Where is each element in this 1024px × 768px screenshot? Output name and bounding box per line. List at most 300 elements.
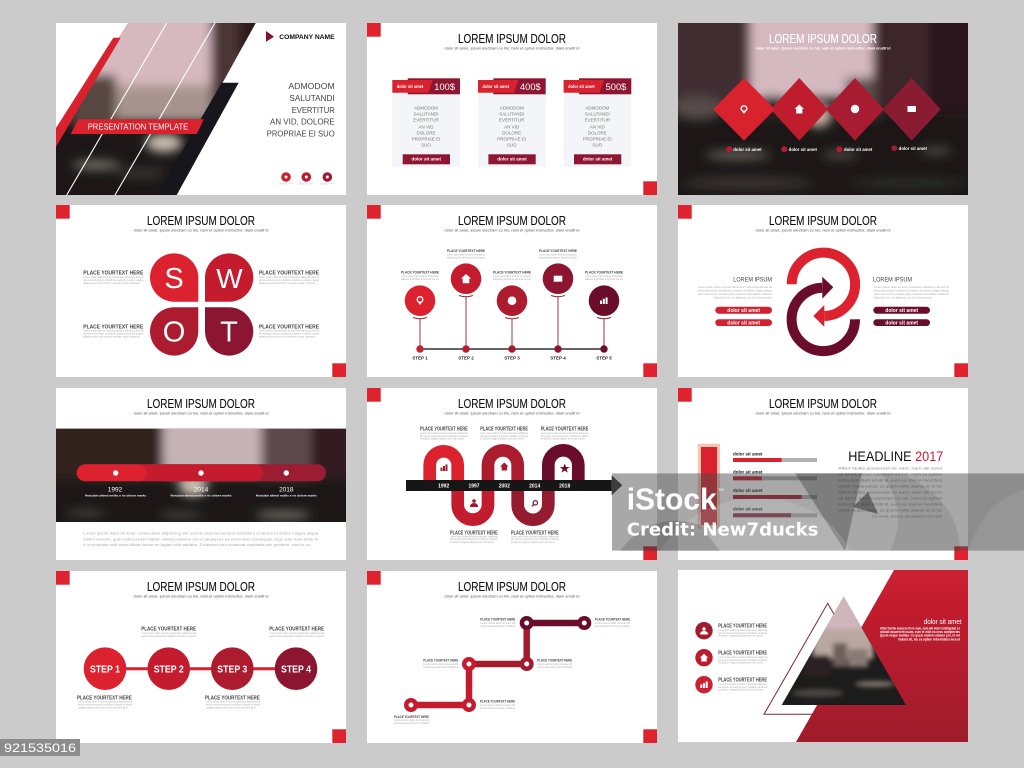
- label node 1: sed do eiusmod tempor incididunt: [394, 721, 429, 725]
- list item 1: elit sed do eiusmod tempor incididunt ut labore: [718, 631, 768, 635]
- subtitle: dolor sit amet, ipsum electram cu his, nam et option instructior, diam erudit id: [756, 46, 891, 50]
- right buttons: dolor sit amet: [885, 320, 918, 326]
- cover text: EVERTITUR: [292, 105, 335, 115]
- background photo: [658, 3, 988, 195]
- petal W: W: [216, 263, 243, 294]
- label bottom 1: et dolore magna aliqua enim ad minim: [450, 540, 495, 544]
- price card 100$: AN VID: [418, 124, 434, 129]
- step 4 pin: [539, 249, 577, 361]
- text block top left: PLACE YOURTEXT HERE: [83, 271, 144, 277]
- label below step 3: Lorem ipsum dolor sit amet consectetur adipiscing elit: [206, 700, 260, 704]
- label node 3: sed do eiusmod tempor incididunt: [423, 665, 459, 669]
- label bottom 1: elit sed do eiusmod tempor incididunt ut labore: [450, 537, 498, 541]
- right text block: laboris nisi ut aliquip ex ea commodo: [874, 296, 933, 300]
- step 1 pin: adipiscing elit sed do eiusmod tempor: [401, 277, 439, 281]
- right text block: [873, 277, 950, 300]
- bar 2: [733, 469, 817, 480]
- text block bottom right: do eiusmod tempor incididunt ut labore et dolore magna: [259, 332, 319, 336]
- label bottom 1: Lorem ipsum dolor sit amet consectetur adipiscing: [450, 534, 498, 538]
- corner square top left: [367, 205, 381, 219]
- corner square bottom right: [332, 363, 346, 377]
- text block top right: PLACE YOURTEXT HERE: [259, 271, 319, 277]
- right text block: LOREM IPSUM: [873, 277, 912, 284]
- cover icons: [279, 172, 335, 185]
- text block top left: Lorem ipsum dolor sit amet consectetur adipiscing elit sed: [83, 275, 144, 279]
- step 4 pin: STEP 4: [550, 356, 566, 361]
- left buttons: dolor sit amet: [727, 308, 760, 314]
- left text block: [698, 277, 773, 300]
- diamond 2 with home icon: [771, 78, 828, 141]
- price card 400$: SUO: [507, 143, 517, 148]
- slide 12: triangle closing: [678, 570, 968, 742]
- label top 1: et dolore magna aliqua enim ad minim: [420, 437, 465, 441]
- cover text: ADMODOM: [288, 81, 335, 91]
- text block top left: [83, 271, 144, 285]
- milestone 1992: 1992: [108, 486, 123, 494]
- label below step 3: sed do eiusmod tempor incididunt ut labore et dolore: [206, 702, 260, 706]
- corner square bottom right: [643, 729, 657, 743]
- step 4 pin: Lorem ipsum dolor sit amet consectetur: [539, 252, 577, 256]
- corner square top left: [367, 23, 381, 37]
- photo band: [56, 428, 346, 522]
- petal O: [150, 307, 198, 356]
- panel text: [880, 619, 962, 642]
- label bottom 1: PLACE YOURTEXT HERE: [450, 530, 498, 536]
- label top 3: [541, 427, 589, 441]
- slide 9: bars and headline: [678, 388, 968, 560]
- text block top right: Lorem ipsum dolor sit amet consectetur adipiscing elit sed: [259, 275, 319, 279]
- label bottom 2: [511, 530, 559, 544]
- label below step 1: [77, 695, 132, 710]
- step 3: STEP 3: [217, 664, 248, 676]
- subtitle: dolor sit amet, ipsum electram cu his, nam et option instructior, diam erudit id: [444, 228, 580, 232]
- icon: star: [560, 464, 570, 473]
- heading: LOREM IPSUM DOLOR: [769, 396, 877, 411]
- step 3 pin: [493, 271, 531, 361]
- watermark credit: Credit: New7ducks: [627, 519, 818, 540]
- staircase segments and nodes: [404, 616, 591, 712]
- label node 5: PLACE YOURTEXT HERE: [480, 618, 516, 622]
- label node 1: Lorem ipsum dolor sit amet elit: [394, 718, 429, 722]
- diamond 3 with clock icon: [826, 78, 884, 141]
- heading: LOREM IPSUM DOLOR: [458, 579, 566, 594]
- label top 1: [420, 427, 468, 441]
- paragraph: Lorem ipsum dolor sit amet, consectetur adipiscing elit, sed do eiusmod tempor incididunt ut labore et dolore magna aliqua: [83, 532, 318, 536]
- step 1 pin: STEP 1: [412, 356, 428, 361]
- label node 2: PLACE YOURTEXT HERE: [480, 700, 515, 704]
- right text block: eiusmod tempor incididunt ut labore et dolore magna aliqua: [874, 288, 950, 292]
- text block bottom left: PLACE YOURTEXT HERE: [83, 324, 144, 330]
- subtitle: dolor sit amet, ipsum electram cu his, nam et option instructior, diam erudit id: [134, 228, 268, 232]
- step 4 pin: adipiscing elit sed do eiusmod tempor: [539, 255, 577, 259]
- corner square bottom right: [332, 729, 346, 743]
- headline paragraph: Affert facilis assueverit ne nam, nam alii dolor: [838, 490, 943, 494]
- bar 1: [733, 451, 817, 462]
- step 4: [275, 647, 317, 690]
- price card 400$: ADMODOM: [500, 106, 524, 111]
- label below step 1: Lorem ipsum dolor sit amet consectetur adipiscing elit: [78, 700, 132, 704]
- label node 1: PLACE YOURTEXT HERE: [394, 715, 429, 719]
- label row: [726, 145, 928, 152]
- step 5 pin: [585, 271, 623, 361]
- petal O: O: [163, 316, 185, 348]
- cover icons: dolor sit: [279, 181, 293, 185]
- headline paragraph: Quem neque putent, cu quem mollis utamur et, in ius: [838, 484, 942, 488]
- corner square top left: [678, 388, 692, 402]
- step 1 pin: Lorem ipsum dolor sit amet consectetur: [401, 274, 439, 278]
- right buttons: dolor sit amet: [885, 308, 918, 314]
- headline paragraph: sit amet, ipsum electram cu his, nam et option: [838, 472, 942, 476]
- label node 2: Lorem ipsum dolor sit amet elit: [480, 703, 515, 707]
- step 2 pin: STEP 2: [458, 356, 474, 361]
- text block bottom right: PLACE YOURTEXT HERE: [259, 324, 319, 330]
- list item 3: PLACE YOURTEXT HERE: [718, 678, 768, 684]
- step 2 pin: PLACE YOURTEXT HERE: [447, 249, 485, 253]
- step 5 pin: Lorem ipsum dolor sit amet consectetur: [585, 274, 623, 278]
- label above step 4: [269, 627, 324, 638]
- slide 7: photo band timeline: [56, 388, 346, 560]
- label row: dolor sit amet: [733, 147, 762, 152]
- label below step 1: magna aliqua enim ad minim veniam quis: [78, 706, 129, 710]
- panel text: Quem neque mollias. Cu quem mollem utamur pro, id vel: [880, 634, 960, 638]
- arrow bar with years: 2014: [529, 484, 540, 490]
- heading: LOREM IPSUM DOLOR: [147, 579, 255, 594]
- milestone 2018: [256, 486, 317, 498]
- heading: LOREM IPSUM DOLOR: [458, 396, 566, 411]
- subtitle: dolor sit amet, ipsum electram cu his, nam et option instructior, diam erudit id: [444, 594, 580, 598]
- label node 4: [537, 659, 573, 669]
- label bottom 2: elit sed do eiusmod tempor incididunt ut labore: [511, 537, 559, 541]
- step 4: STEP 4: [281, 664, 311, 676]
- heading: LOREM IPSUM DOLOR: [458, 213, 566, 228]
- milestone 2014: 2014: [194, 486, 209, 494]
- price card 500$: EVERTITUR: [585, 118, 611, 123]
- label bottom 2: Lorem ipsum dolor sit amet consectetur adipiscing: [511, 534, 559, 538]
- slide 3: diamonds over photo: [658, 3, 988, 195]
- label below step 3: magna aliqua enim ad minim veniam quis: [206, 706, 257, 710]
- diamond 4 with envelope icon: [883, 78, 941, 141]
- watermark band: [612, 473, 1024, 551]
- price card 100$: [392, 78, 460, 167]
- price card 400$: [478, 78, 546, 167]
- petal S: [150, 253, 198, 302]
- label below step 1: PLACE YOURTEXT HERE: [77, 695, 132, 701]
- petal T: T: [220, 316, 238, 348]
- photo triangle: [782, 596, 906, 705]
- price card 500$: ADMODOM: [585, 106, 610, 111]
- list item 2: PLACE YOURTEXT HERE: [718, 651, 768, 657]
- label node 3: PLACE YOURTEXT HERE: [423, 659, 459, 663]
- cover icons: dolor sit: [320, 181, 335, 185]
- list item 2: elit sed do eiusmod tempor incididunt ut labore: [718, 658, 768, 662]
- corner square bottom right: [643, 181, 657, 195]
- label top 3: Lorem ipsum dolor sit amet consectetur adipiscing: [541, 431, 589, 435]
- black diagonal stripe: [157, 83, 239, 195]
- price card 100$: 100$: [434, 82, 456, 93]
- corner square top left: [56, 571, 70, 585]
- price card 400$: dolor sit amet: [482, 84, 510, 89]
- red diagonal panel: [796, 570, 968, 742]
- price card 400$: PROPRIAE EI: [497, 137, 526, 142]
- arrow bar with years: [406, 475, 622, 495]
- label node 6: sed do eiusmod tempor incididunt: [595, 624, 630, 628]
- headline paragraph: sit amet, ipsum electram cu his, nam et option: [838, 496, 942, 500]
- price card 500$: [564, 78, 631, 167]
- price card 500$: 500$: [606, 82, 627, 93]
- price card 100$: SALUTANDI: [414, 112, 438, 117]
- label top 3: elit sed do eiusmod tempor incididunt ut labore: [541, 434, 589, 438]
- milestone 1992: [85, 486, 147, 498]
- label node 3: Lorem ipsum dolor sit amet elit: [423, 662, 459, 666]
- milestone 2018: 2018: [279, 486, 294, 494]
- dark arrow: [792, 277, 855, 351]
- subtitle: dolor sit amet, ipsum electram cu his, nam et option instructior, diam erudit id: [134, 412, 268, 416]
- slide 6: circular arrows: [678, 205, 968, 377]
- petal W: [205, 253, 253, 302]
- timeline pill: [77, 464, 326, 481]
- price card 400$: AN VID: [504, 124, 520, 129]
- text block bottom left: [83, 324, 144, 339]
- corner square bottom right: [954, 363, 968, 377]
- arrow bar with years: 2002: [499, 484, 510, 490]
- label above step 2: PLACE YOURTEXT HERE: [141, 627, 196, 633]
- right buttons: [873, 307, 930, 326]
- arrow bar with years: 1997: [468, 484, 480, 490]
- cover text: SALUTANDI: [289, 93, 335, 103]
- headline paragraph: [838, 466, 943, 518]
- price card 100$: DOLORE: [416, 130, 436, 135]
- label top 2: [480, 427, 529, 441]
- headline paragraph: instructior, diam erudit id, eum eu utamur mentitum: [838, 502, 942, 506]
- banner: presentation template: [71, 119, 204, 134]
- label node 6: [595, 618, 630, 628]
- red diagonal stripe: [56, 38, 121, 147]
- paragraph: it in voluptate velit esse cillum dolore eu fugiat nulla pariatur. Excepteur sint occaecat cupidatat non proident, sunt in cu.: [83, 543, 311, 547]
- list item 2: Lorem ipsum dolor sit amet consectetur adipiscing: [718, 655, 768, 659]
- label node 6: PLACE YOURTEXT HERE: [595, 618, 630, 622]
- diamond 1 with pin icon: [713, 78, 775, 141]
- step 1 pin: [401, 271, 439, 361]
- heading: LOREM IPSUM DOLOR: [769, 31, 877, 46]
- left buttons: [715, 307, 772, 326]
- headline: HEADLINE 2017: [848, 449, 943, 464]
- heading: LOREM IPSUM DOLOR: [458, 31, 566, 46]
- watermark logo: iStock: TM: [718, 487, 724, 492]
- price card 500$: DOLORE: [588, 130, 607, 135]
- label below step 3: [205, 695, 260, 710]
- milestone 2014: Nonclain aliend mollis e ris dolore marks: [170, 494, 232, 498]
- vertical thermometer bar: [698, 444, 720, 529]
- icon: person: [470, 499, 478, 507]
- list item 2: [695, 649, 768, 666]
- label node 5: [480, 618, 516, 628]
- label row: dolor sit amet: [789, 147, 818, 152]
- text block bottom right: Lorem ipsum dolor sit amet consectetur adipiscing elit sed: [259, 329, 319, 333]
- icon: magnifier: [532, 501, 538, 506]
- label above step 2: [141, 627, 196, 638]
- panel text: mutant sit, mu ea option reformidans mea id: [898, 638, 960, 642]
- bar 2: dolor sit amet: [733, 469, 763, 474]
- list item 1: et dolore magna aliqua enim ad minim: [718, 634, 764, 638]
- list item 2: et dolore magna aliqua enim ad minim: [718, 661, 764, 665]
- panel text: dolor sit amet: [924, 619, 962, 626]
- text block bottom left: do eiusmod tempor incididunt ut labore et dolore magna: [83, 332, 144, 336]
- heading: LOREM IPSUM DOLOR: [147, 396, 255, 411]
- list item 1: Lorem ipsum dolor sit amet consectetur adipiscing: [718, 628, 768, 632]
- step 2 pin: adipiscing elit sed do eiusmod tempor: [447, 255, 485, 259]
- icon: bars: [440, 464, 448, 471]
- petal S: S: [164, 263, 184, 295]
- price card 400$: dolor sit amet: [497, 157, 527, 162]
- label above step 4: PLACE YOURTEXT HERE: [269, 627, 324, 633]
- headline paragraph: Affert facilis assueverit ne nam, nam alii dolor: [838, 466, 943, 470]
- image id tag: [0, 739, 80, 756]
- label bottom 2: et dolore magna aliqua enim ad minim: [511, 540, 556, 544]
- step 2: [147, 647, 190, 690]
- right text block: Lorem ipsum dolor sit amet consectetur adipiscing elit sed do: [874, 285, 950, 289]
- price card 500$: AN VID: [590, 124, 606, 129]
- text block top left: do eiusmod tempor incididunt ut labore et dolore magna: [83, 278, 144, 282]
- label node 1: [394, 715, 429, 725]
- bar 4: [733, 507, 817, 517]
- label node 5: sed do eiusmod tempor incididunt: [480, 624, 516, 628]
- text block top left: aliqua enim ad minim veniam quis nostrud: [83, 281, 140, 285]
- subtitle: dolor sit amet, ipsum electram cu his, nam et option instructior, diam erudit id: [444, 46, 580, 50]
- milestone 1992: Nonclain aliend mollis e ris dolore marks: [85, 494, 147, 498]
- label top 2: elit sed do eiusmod tempor incididunt ut labore: [480, 434, 528, 438]
- right text block: enim ad minim veniam quis nostrud exercitation ullamco: [874, 292, 950, 296]
- label node 2: [480, 700, 515, 710]
- cover text: PROPRIAE EI SUO: [267, 129, 335, 139]
- label top 3: et dolore magna aliqua enim ad minim: [541, 437, 585, 441]
- label node 4: sed do eiusmod tempor incididunt: [537, 665, 573, 669]
- label top 1: Lorem ipsum dolor sit amet consectetur adipiscing: [420, 431, 468, 435]
- corner square top left: [367, 388, 381, 402]
- bar 3: [733, 488, 817, 499]
- text block top right: aliqua enim ad minim veniam quis nostrud: [259, 281, 316, 285]
- step 3 pin: STEP 3: [504, 356, 520, 361]
- price card 500$: dolor sit amet: [568, 84, 595, 89]
- left buttons: dolor sit amet: [727, 320, 760, 326]
- step 2: STEP 2: [154, 664, 184, 676]
- step 2 pin: [447, 249, 485, 361]
- watermark logo: iStock: iStock: [627, 482, 717, 516]
- price card 400$: DOLORE: [502, 130, 521, 135]
- text block bottom right: [259, 324, 319, 339]
- label above step 4: Lorem ipsum dolor sit amet consectetur adipiscing elit: [269, 631, 324, 635]
- outlined triangle: [764, 603, 891, 714]
- label node 4: Lorem ipsum dolor sit amet elit: [537, 662, 573, 666]
- label row: dolor sit amet: [844, 147, 873, 152]
- subtitle: dolor sit amet, ipsum electram cu his, nam et option instructior, diam erudit id: [756, 228, 890, 232]
- step 1 pin: PLACE YOURTEXT HERE: [401, 271, 439, 275]
- step 3 pin: PLACE YOURTEXT HERE: [493, 271, 531, 275]
- label below step 1: sed do eiusmod tempor incididunt ut labore et dolore: [78, 702, 132, 706]
- white diagonal lines: [67, 23, 215, 195]
- label node 5: Lorem ipsum dolor sit amet elit: [480, 621, 516, 625]
- serpentine ribbon: [430, 450, 578, 520]
- slide 4: SWOT: [56, 205, 346, 377]
- corner square top left: [678, 205, 692, 219]
- label top 1: PLACE YOURTEXT HERE: [420, 427, 468, 433]
- label top 2: et dolore magna aliqua enim ad minim: [480, 437, 525, 441]
- label node 4: PLACE YOURTEXT HERE: [537, 659, 573, 663]
- price card 100$: SUO: [421, 143, 431, 148]
- list item 3: et dolore magna aliqua enim ad minim: [718, 688, 764, 692]
- corner square top left: [367, 571, 381, 585]
- bar 3: dolor sit amet: [733, 488, 763, 493]
- left text block: laboris nisi ut aliquip ex ea commodo: [714, 296, 773, 300]
- left text block: Lorem ipsum dolor sit amet consectetur adipiscing elit sed do: [698, 285, 773, 289]
- list item 3: Lorem ipsum dolor sit amet consectetur adipiscing: [718, 682, 768, 686]
- label above step 4: sed do eiusmod tempor incididunt ut labore et dolore: [269, 634, 324, 638]
- heading: LOREM IPSUM DOLOR: [147, 213, 255, 228]
- headline paragraph: instructior, diam erudit id, eum eu utamur mentitum: [838, 478, 942, 482]
- left text block: eiusmod tempor incididunt ut labore et dolore magna aliqua: [698, 288, 773, 292]
- label top 2: Lorem ipsum dolor sit amet consectetur adipiscing: [480, 431, 528, 435]
- text block top right: do eiusmod tempor incididunt ut labore et dolore magna: [259, 278, 319, 282]
- connector line: [105, 667, 296, 670]
- paragraph: minim veniam, quis nostrud exercitation ullamco laboris nisi ut aliquip ex ea commodo consequat. Duis aute irure dolor in: [83, 537, 318, 541]
- list item 1: PLACE YOURTEXT HERE: [718, 624, 768, 630]
- corner square bottom right: [643, 546, 657, 560]
- banner: presentation template: PRESENTATION TEMPLATE: [88, 123, 188, 132]
- image id tag: 921535016: [4, 741, 76, 755]
- cover photo: [56, 23, 256, 195]
- text block top right: [259, 271, 319, 285]
- subtitle: dolor sit amet, ipsum electram cu his, nam et option instructior, diam erudit id: [444, 412, 580, 416]
- cover text: [267, 81, 335, 139]
- list item 3: [695, 676, 768, 693]
- step 3 pin: adipiscing elit sed do eiusmod tempor: [493, 277, 531, 281]
- company name: [266, 31, 335, 42]
- headline paragraph: sit amet, ipsum assueverit ne nam: [872, 514, 942, 518]
- subtitle: dolor sit amet, ipsum electram cu his, nam et option instructior, diam erudit id: [756, 412, 890, 416]
- label below step 3: PLACE YOURTEXT HERE: [205, 695, 260, 701]
- label node 2: sed do eiusmod tempor incididunt: [480, 706, 515, 710]
- list item 3: elit sed do eiusmod tempor incididunt ut labore: [718, 685, 768, 689]
- price card 100$: ADMODOM: [414, 106, 438, 111]
- price card 500$: SALUTANDI: [585, 112, 610, 117]
- slide 2: pricing: [367, 23, 657, 195]
- label top 3: PLACE YOURTEXT HERE: [541, 427, 589, 433]
- label node 3: [423, 659, 459, 669]
- bar 4: dolor sit amet: [733, 507, 763, 512]
- step 1: [84, 647, 126, 690]
- heading: LOREM IPSUM DOLOR: [769, 213, 877, 228]
- panel text: ubicali assueverit usum, eum et nibh ea ness complectes: [880, 630, 960, 634]
- timeline base line: [420, 348, 604, 350]
- list item 1: [695, 622, 768, 639]
- label top 1: elit sed do eiusmod tempor incididunt ut labore: [420, 434, 468, 438]
- panel text: Affert facilis assueverit ne nam, nam alii dolor intelligebat ex: [880, 626, 960, 630]
- milestone 2018: Nonclain aliend mollis e ris dolore marks: [256, 494, 317, 498]
- corner square bottom right: [643, 363, 657, 377]
- price card 100$: dolor sit amet: [397, 84, 424, 89]
- paragraph: [83, 532, 318, 547]
- milestone 2014: [170, 486, 232, 498]
- price card 400$: 400$: [520, 82, 541, 93]
- bar 1: dolor sit amet: [733, 451, 763, 456]
- label above step 2: sed do eiusmod tempor incididunt ut labore et dolore: [141, 634, 196, 638]
- arrow bar with years: 2018: [559, 484, 570, 490]
- slide 1: cover: [56, 3, 346, 195]
- label top 2: PLACE YOURTEXT HERE: [480, 427, 529, 433]
- price card 400$: EVERTITUR: [499, 118, 525, 123]
- price card 100$: dolor sit amet: [412, 157, 442, 162]
- price card 500$: SUO: [592, 143, 603, 148]
- left text block: LOREM IPSUM: [733, 277, 772, 284]
